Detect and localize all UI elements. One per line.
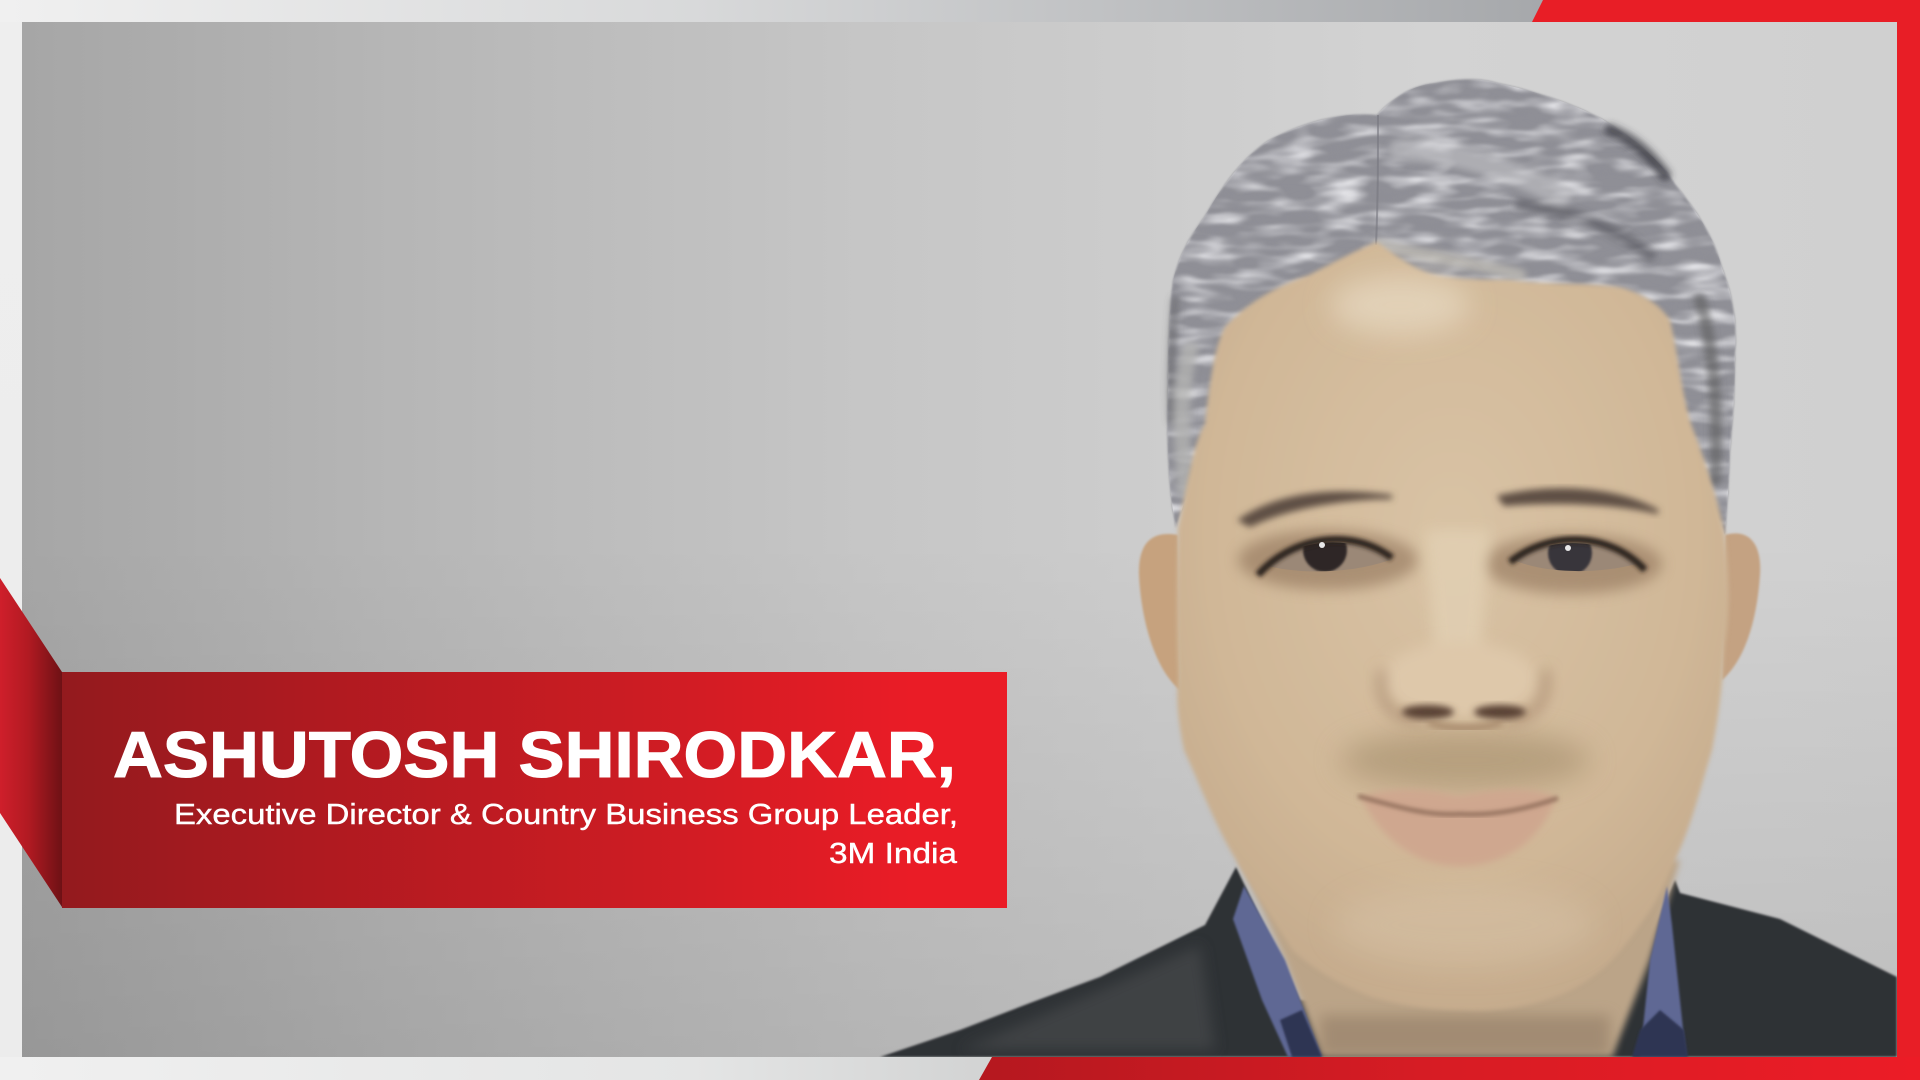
hair strands bbox=[1171, 130, 1716, 490]
sweater bbox=[880, 867, 1897, 1057]
frame: bottom light band bbox=[0, 1057, 992, 1080]
left eyebrow bbox=[1241, 494, 1392, 525]
neck shadow lower bbox=[1320, 1015, 1610, 1057]
neck bbox=[1240, 860, 1680, 1057]
name heading: ASHUTOSH SHIRODKAR, bbox=[113, 718, 956, 791]
moustache shadow bbox=[1340, 730, 1590, 790]
nose bbox=[1381, 530, 1546, 728]
shirt dark lower right bbox=[1632, 1010, 1688, 1057]
left eye bbox=[1258, 528, 1392, 575]
eye socket shadow right bbox=[1482, 534, 1662, 594]
frame: bottom red band bbox=[979, 1057, 1920, 1080]
frame: top grey band bbox=[0, 0, 1543, 22]
job title line 2: 3M India bbox=[829, 838, 958, 870]
red name banner bbox=[62, 672, 1007, 908]
shirt collar right bbox=[1640, 886, 1686, 1057]
left ear bbox=[1139, 534, 1180, 690]
right ear bbox=[1722, 533, 1760, 680]
chin highlight bbox=[1358, 906, 1574, 952]
hair parting bbox=[1376, 115, 1378, 245]
portrait photo bbox=[880, 79, 1897, 1057]
ribbon fold at left bbox=[0, 578, 62, 907]
sweater lighter left shoulder bbox=[981, 950, 1214, 1050]
shirt dark lower left bbox=[1280, 1010, 1322, 1057]
forehead highlight bbox=[1330, 275, 1470, 335]
eye socket shadow left bbox=[1238, 530, 1418, 590]
face bbox=[1176, 242, 1729, 1010]
right eye bbox=[1510, 531, 1645, 575]
frame: top and right red corner bbox=[1532, 0, 1920, 1080]
job title line 1: Executive Director & Country Business Group Leader, bbox=[174, 799, 958, 831]
shirt collar left bbox=[1233, 886, 1322, 1057]
right eyebrow bbox=[1500, 490, 1658, 512]
mouth bbox=[1358, 790, 1558, 866]
hair bbox=[1167, 79, 1736, 535]
